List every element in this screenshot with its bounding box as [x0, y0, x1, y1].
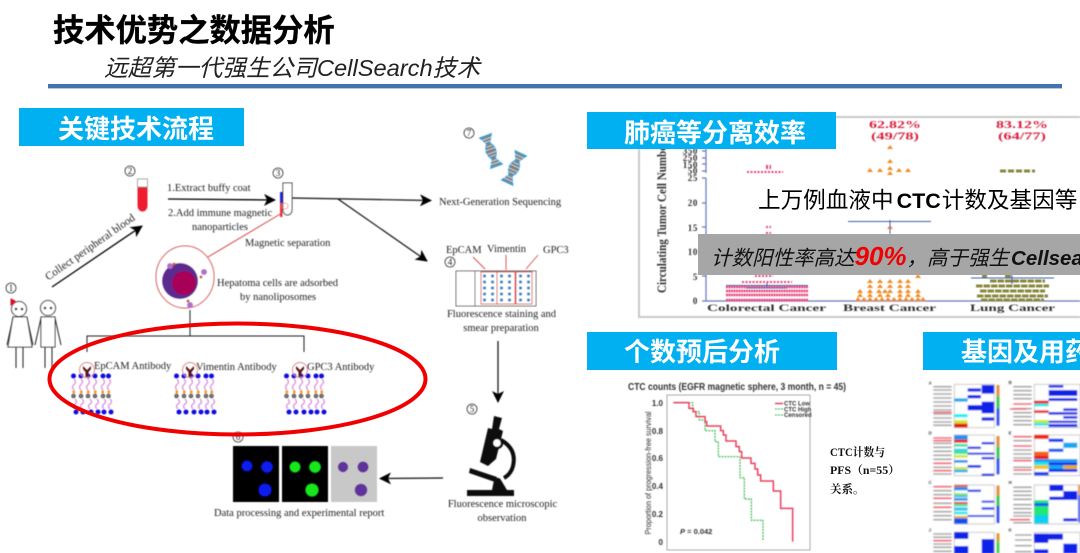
step number 4 — [445, 257, 455, 267]
arrow: collect peripheral blood — [52, 226, 142, 287]
step number 5 — [467, 404, 477, 414]
panel: survival chart — [628, 382, 846, 550]
heatmap E: E — [1009, 431, 1012, 436]
colorectal points — [726, 166, 808, 300]
heatmap E — [1009, 431, 1080, 476]
text: CTC PFS relation — [830, 445, 900, 496]
arrow: to staining — [338, 199, 427, 261]
breast points — [855, 145, 926, 301]
label: collect peripheral blood: Collect peripheral blood — [43, 212, 138, 283]
heatmap K: K — [1009, 527, 1013, 532]
step number 5: 5 — [470, 404, 475, 414]
title: 技术优势之数据分析 — [53, 13, 335, 48]
icon: DNA strands — [480, 134, 526, 185]
chart y axis: 50 — [688, 166, 698, 176]
heatmap H — [1009, 480, 1080, 524]
chart y axis: 15 — [688, 223, 698, 233]
heatmap D: D — [929, 431, 932, 436]
heatmap H: H — [1009, 480, 1012, 485]
label: fluorescence microscopic observation: Fluorescence microscopic — [448, 499, 558, 510]
icon: hepatoma cell — [156, 246, 214, 308]
heatmap J: J — [929, 527, 932, 532]
label: magnetic separation: Magnetic separation — [245, 238, 331, 249]
chart y axis: 350 — [683, 146, 698, 156]
category labels — [707, 304, 1056, 314]
label: hepatoma adsorbed — [217, 278, 339, 303]
survival y axis: 1.0 — [652, 399, 664, 408]
survival y axis: 0.6 — [652, 454, 664, 463]
label: add immune nanoparticles: 2.Add immune magnetic — [168, 208, 272, 219]
text: CTC PFS relation: PFS（n=55） — [830, 464, 900, 477]
heading: count prognosis — [587, 332, 837, 370]
callout line — [208, 213, 282, 257]
category labels: Lung Cancer — [970, 304, 1056, 314]
label: hepatoma adsorbed: by nanoliposomes — [240, 292, 316, 303]
survival legend: Censored — [784, 413, 812, 419]
subtitle: 远超第一代强生公司CellSearch技术 — [104, 55, 483, 81]
panel: gene heatmaps — [929, 380, 1080, 553]
liposome: GPC3 — [284, 362, 326, 414]
chart y axis: 25 — [688, 173, 698, 183]
percentage labels: 83.12% — [996, 120, 1048, 131]
step number 2: 2 — [128, 166, 132, 176]
survival y axis — [644, 399, 664, 547]
labels: slide markers: EpCAM — [446, 245, 482, 256]
percentage labels: (49/78) — [871, 132, 919, 142]
percentage labels: (64/77) — [998, 132, 1046, 142]
category labels: Colorectal Cancer — [707, 304, 827, 314]
chart y axis: 0 — [693, 296, 698, 306]
label: fluorescence microscopic observation: observation — [478, 513, 527, 524]
antibody tree connector — [87, 310, 304, 352]
chart y axis: 10 — [688, 247, 698, 257]
label: staining and smear: smear preparation — [463, 323, 539, 334]
arrow: to sequencing — [292, 198, 431, 200]
survival y axis: Proportion of progression-free survival — [644, 411, 653, 534]
heading: separation efficiency — [587, 112, 836, 149]
step number 4: 4 — [448, 257, 453, 267]
error bars — [726, 220, 1054, 288]
chart y axis — [683, 145, 1080, 306]
step number 2 — [125, 166, 135, 176]
chart frame — [639, 117, 1080, 317]
icon: magnetic tube — [280, 183, 292, 217]
heatmap K — [1009, 527, 1080, 553]
lung points — [976, 171, 1049, 300]
heading: key workflow: 关键技术流程 — [58, 114, 214, 144]
survival curves — [673, 403, 793, 542]
survival legend — [775, 402, 812, 419]
label: Vimentin antibody: Vimentin Antibody — [196, 362, 277, 373]
panel: separation efficiency chart — [639, 117, 1080, 317]
label: next-generation sequencing: Next-Generation Sequencing — [439, 197, 562, 208]
label: staining and smear — [447, 309, 557, 334]
heatmap A — [929, 381, 999, 428]
heading: key workflow — [19, 108, 244, 146]
step number 7: 7 — [467, 128, 472, 138]
step number 6 — [233, 432, 243, 442]
fluorescence images — [233, 446, 377, 502]
step number 1: 1 — [9, 283, 13, 293]
liposome: EpCAM — [71, 362, 114, 414]
panel: key technology workflow — [6, 128, 569, 524]
text: CTC PFS relation: 关系。 — [830, 482, 864, 496]
step number 7 — [464, 128, 474, 138]
label: add immune nanoparticles — [168, 208, 272, 233]
step number 6: 6 — [236, 432, 241, 442]
survival plot box — [667, 395, 810, 550]
label: EpCAM antibody: EpCAM Antibody — [94, 361, 172, 372]
labels: slide markers: Vimentin — [487, 244, 527, 255]
icon: staining slide — [456, 255, 538, 306]
heatmap A: A — [929, 381, 933, 386]
label: extract buffy coat: 1.Extract buffy coat — [167, 183, 251, 194]
step number 3: 3 — [276, 168, 281, 178]
percentage labels — [869, 120, 1048, 142]
label: hepatoma adsorbed: Hepatoma cells are adsorbed — [217, 278, 339, 289]
heading: genes and medication — [923, 332, 1080, 370]
survival y axis: 0 — [659, 538, 664, 547]
chart y axis: 250 — [683, 153, 698, 163]
label: fluorescence microscopic observation — [448, 499, 558, 524]
heading: count prognosis: 个数预后分析 — [624, 337, 780, 367]
heatmap C — [929, 480, 999, 524]
text: CTC PFS relation: CTC计数与 — [830, 445, 885, 459]
survival title: CTC counts (EGFR magnetic sphere, 3 month, n = 45) — [628, 382, 846, 393]
icon: blood tube — [138, 179, 148, 212]
category labels: Breast Cancer — [843, 304, 937, 314]
label: staining and smear: Fluorescence staining and — [447, 309, 557, 320]
highlight ellipse — [50, 324, 426, 434]
survival legend: CTC Low — [784, 402, 810, 408]
labels: slide markers — [446, 244, 569, 256]
heatmap J — [929, 527, 999, 553]
heatmap B: B — [1009, 380, 1012, 385]
arrow: to report — [380, 477, 443, 480]
survival y axis: 0.8 — [652, 427, 664, 436]
icon: two people — [7, 299, 61, 368]
icon: microscope — [467, 416, 514, 496]
p value: P = 0.042 — [680, 527, 712, 536]
label: GPC3 antibody: GPC3 Antibody — [307, 362, 375, 373]
step number 1 — [6, 283, 16, 293]
heading: sample scale: 上万例血液中CTC计数及基因等 — [758, 188, 1077, 213]
chart y axis: 20 — [688, 198, 698, 208]
survival y axis: 0.2 — [652, 510, 664, 519]
heading: separation efficiency: 肺癌等分离效率 — [624, 118, 806, 148]
step number 3 — [273, 168, 283, 178]
arrow: to magnetic tube — [168, 199, 275, 200]
heatmap D — [929, 431, 999, 476]
labels: slide markers: GPC3 — [543, 245, 569, 256]
heatmap C: C — [929, 480, 932, 485]
chart y label: Circulating Tumor Cell Number — [655, 141, 669, 293]
label: add immune nanoparticles: nanoparticles — [192, 222, 248, 233]
label: data processing: Data processing and experimental report — [214, 508, 384, 519]
chart y axis: 5 — [693, 272, 698, 282]
survival legend: CTC High — [784, 408, 812, 414]
heatmap B — [1009, 380, 1080, 428]
arrow: to microscope — [497, 341, 499, 402]
survival y axis: 0.4 — [652, 482, 664, 491]
header rule — [48, 84, 1062, 89]
liposome: Vimentin — [174, 362, 216, 414]
chart y axis: 150 — [683, 160, 698, 170]
percentage labels: 62.82% — [869, 120, 921, 131]
